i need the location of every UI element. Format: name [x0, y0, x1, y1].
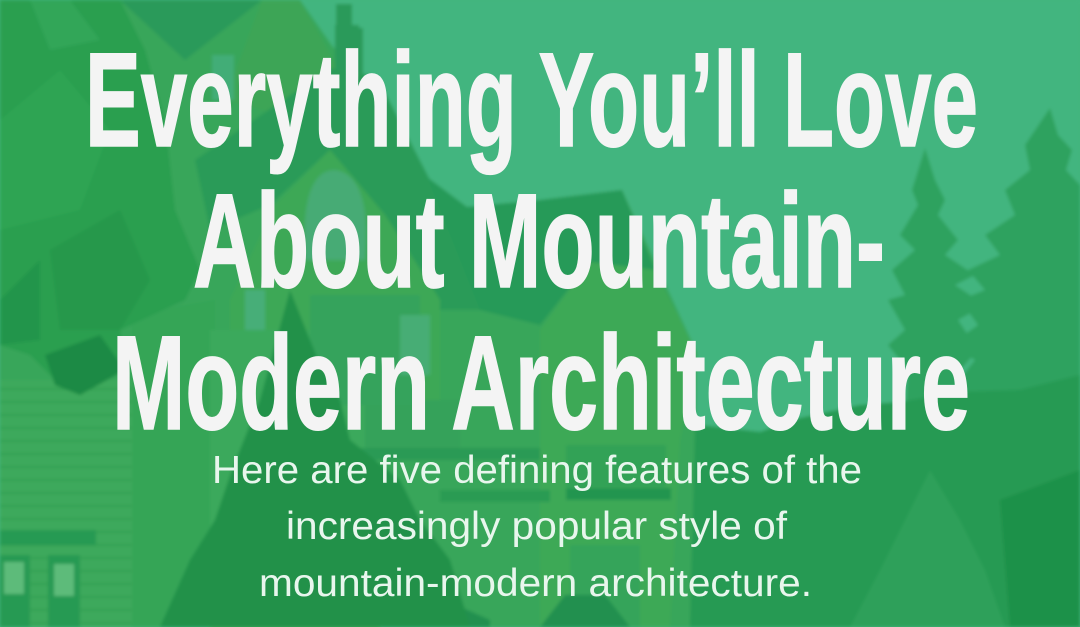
column wall [210, 330, 380, 627]
subtitle text block: increasingly popular style of [286, 505, 787, 548]
window glints [212, 55, 234, 100]
subtitle text block: mountain-modern architecture. [259, 562, 812, 605]
subtitle text block: Here are five defining features of the [212, 449, 862, 492]
foliage left [0, 0, 200, 395]
third roof [427, 177, 655, 325]
gable with arched window [230, 150, 440, 440]
roof dark left [120, 0, 262, 60]
upper windows [310, 295, 420, 405]
title [85, 26, 978, 458]
conifers right [888, 108, 1080, 440]
subtitle text block [212, 449, 862, 605]
foreground trees bottom right [660, 375, 1080, 627]
second roof [195, 68, 497, 310]
right house balcony and windows [566, 445, 666, 487]
window group left [0, 530, 96, 627]
wall lower left with siding [0, 380, 132, 627]
chimney [335, 4, 363, 98]
tree in front of house [160, 290, 470, 627]
right gable wall [540, 262, 697, 627]
house silhouette [0, 0, 697, 627]
gable upper [225, 0, 350, 130]
balcony [365, 400, 460, 450]
